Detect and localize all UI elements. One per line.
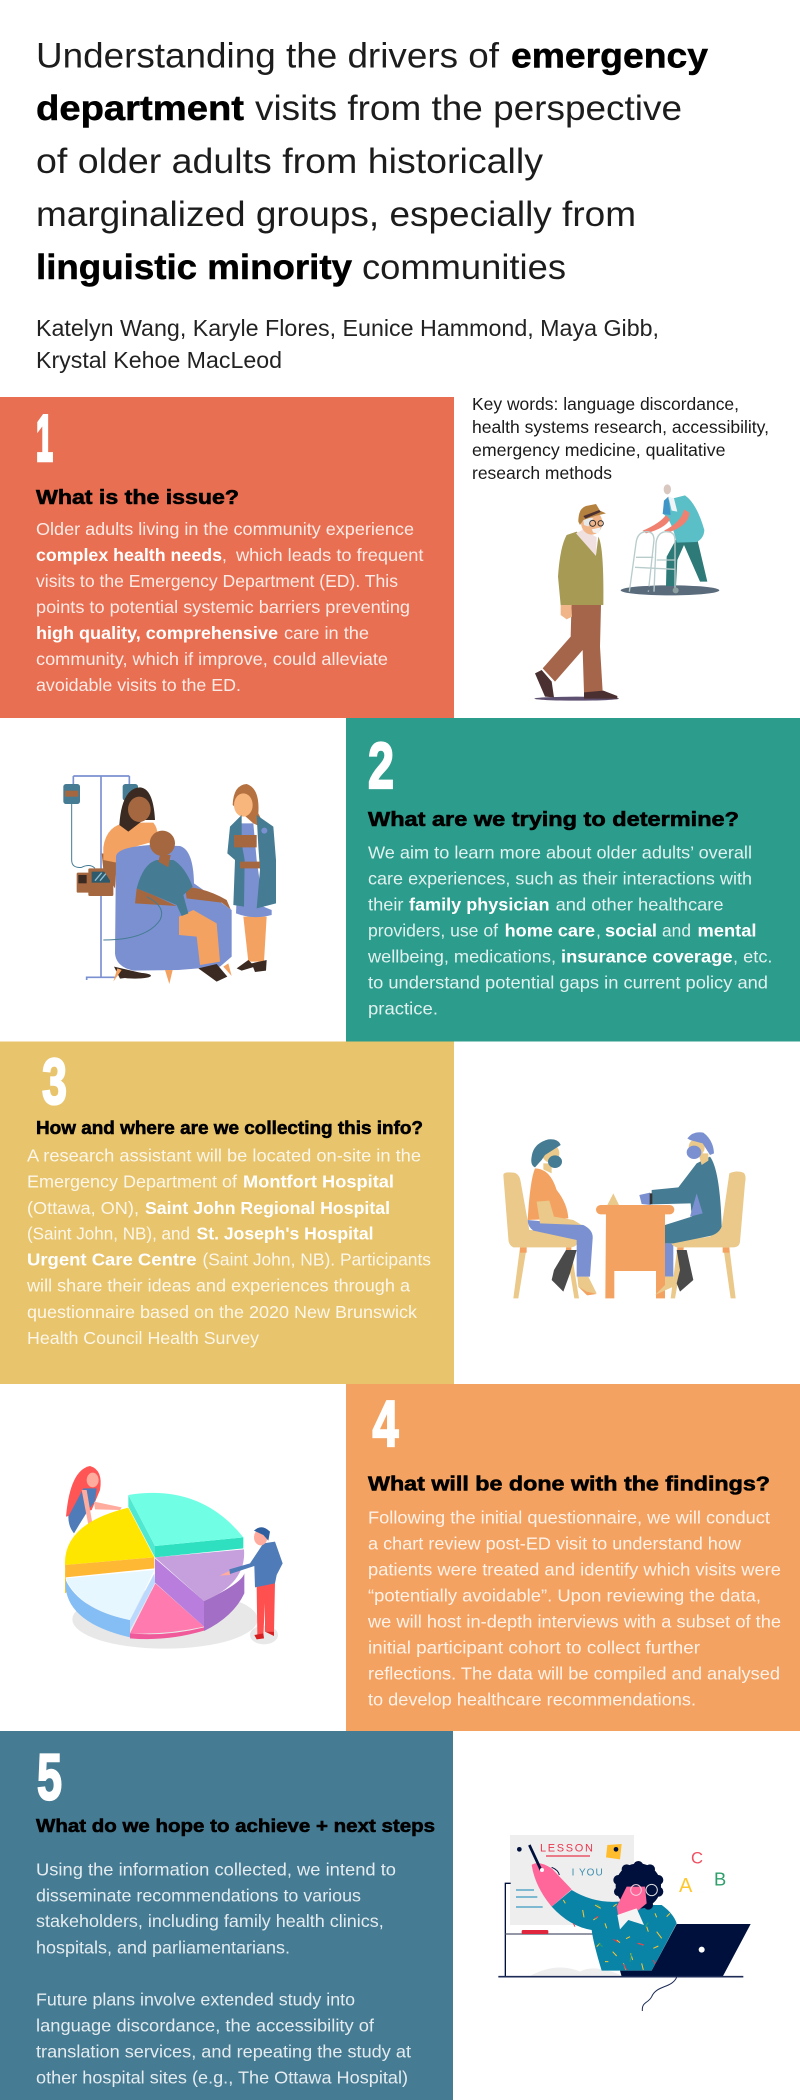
text block: collecting: questionnaire based on the 2020 New Brunswick bbox=[27, 1302, 417, 1322]
text block: findings: reflections. The data will be compiled and analysed bbox=[368, 1664, 780, 1684]
number 3: 3 bbox=[42, 1045, 67, 1118]
panel 3: how and where are we collecting this info bbox=[0, 1042, 454, 1384]
title: visits from the perspective bbox=[255, 89, 682, 128]
text block: recommendations: hospitals, and parliamentarians. bbox=[36, 1938, 290, 1958]
text block: determine: We aim to learn more about older adults’ overall bbox=[368, 842, 752, 862]
title: communities bbox=[362, 248, 566, 287]
text block: issue: points to potential systemic barriers preventing bbox=[36, 597, 410, 617]
text block: determine: , etc. bbox=[733, 946, 772, 966]
text block: issue: which leads to frequent bbox=[235, 545, 424, 565]
icon: teacher with board and laptop: LESSON bbox=[540, 1843, 595, 1855]
number 4: 4 bbox=[372, 1387, 398, 1460]
title: marginalized groups, especially from bbox=[36, 195, 636, 234]
key words: research methods bbox=[472, 463, 612, 483]
text block: issue: care in the bbox=[284, 623, 369, 643]
text block: issue: community, which if improve, could alleviate bbox=[36, 649, 388, 669]
authors bbox=[36, 315, 659, 373]
text block: determine: , bbox=[596, 921, 601, 941]
key words: health systems research, accessibility, bbox=[472, 417, 769, 437]
text block: issue: complex health needs bbox=[36, 545, 222, 565]
text block: findings: patients were treated and identify which visits were bbox=[368, 1559, 781, 1579]
heading: what will be done: What will be done with the findings? bbox=[368, 1473, 770, 1496]
text block: determine: providers, use of bbox=[368, 921, 498, 941]
icon: teacher with board and laptop bbox=[498, 1835, 751, 2011]
text block: determine: to understand potential gaps in current policy and bbox=[368, 972, 768, 992]
text block: collecting bbox=[26, 1146, 431, 1348]
number 2: 2 bbox=[368, 729, 394, 802]
icon: people with 3D pie chart bbox=[65, 1466, 283, 1649]
panel 1: what is the issue bbox=[0, 397, 454, 718]
text block: findings: to develop healthcare recommendations. bbox=[368, 1689, 696, 1709]
number 5: 5 bbox=[37, 1740, 62, 1814]
text block: determine: mental bbox=[698, 921, 756, 941]
icon: teacher with board and laptop: B bbox=[714, 1868, 726, 1889]
panel 5: what do we hope to achieve and next steps bbox=[0, 1731, 453, 2100]
key words: emergency medicine, qualitative bbox=[472, 440, 726, 460]
title: Understanding the drivers of bbox=[36, 36, 499, 76]
text block: future plans: language discordance, the accessibility of bbox=[36, 2016, 374, 2036]
text block: collecting: St. Joseph's Hospital bbox=[196, 1224, 374, 1244]
text block: determine bbox=[367, 842, 772, 1018]
text block: determine: practice. bbox=[368, 998, 438, 1018]
text block: issue: high quality, comprehensive bbox=[36, 623, 278, 643]
authors: Krystal Kehoe MacLeod bbox=[36, 347, 282, 373]
key words: Key words: language discordance, bbox=[472, 394, 739, 414]
text block: determine: and bbox=[662, 921, 691, 941]
text block: collecting: Saint John Regional Hospital bbox=[145, 1198, 390, 1218]
title: of older adults from historically bbox=[36, 142, 544, 181]
text block: collecting: will share their ideas and experiences through a bbox=[26, 1276, 410, 1296]
text block: future plans: other hospital sites (e.g., The Ottawa Hospital) bbox=[36, 2068, 408, 2088]
text block: determine: their bbox=[368, 894, 404, 914]
text block: collecting: Montfort Hospital bbox=[243, 1172, 394, 1192]
text block: collecting: A research assistant will be located on-site in the bbox=[27, 1146, 421, 1166]
text block: findings: a chart review post-ED visit to understand how bbox=[368, 1534, 741, 1554]
panel 2 background bbox=[346, 718, 800, 1042]
text block: recommendations: disseminate recommendations to various bbox=[36, 1885, 361, 1905]
panel 4: what will be done with the findings bbox=[346, 1384, 800, 1731]
text block: issue: , bbox=[222, 545, 227, 565]
text block: determine: and other healthcare bbox=[556, 894, 724, 914]
heading: how and where: How and where are we collecting this info? bbox=[36, 1118, 423, 1138]
panel 1: what is the issue: 1 bbox=[36, 402, 53, 474]
text block: issue bbox=[36, 519, 424, 695]
panel 2: what are we trying to determine bbox=[346, 718, 800, 1042]
text block: issue: visits to the Emergency Department (ED). This bbox=[36, 571, 398, 591]
title: emergency bbox=[511, 36, 709, 76]
text block: issue: Older adults living in the community experience bbox=[36, 519, 414, 539]
panel 5 background bbox=[0, 1731, 453, 2100]
text block: determine: care experiences, such as their interactions with bbox=[368, 868, 752, 888]
text block: collecting: Health Council Health Survey bbox=[27, 1328, 259, 1348]
text block: findings: we will host in-depth interviews with a subset of the bbox=[367, 1612, 781, 1632]
text block: findings: “potentially avoidable”. Upon reviewing the data, bbox=[368, 1585, 761, 1605]
text block: determine: family physician bbox=[409, 894, 550, 914]
panel 1 background bbox=[0, 397, 454, 718]
text block: collecting: (Ottawa, ON), bbox=[27, 1198, 139, 1218]
icon: teacher with board and laptop: C bbox=[691, 1848, 703, 1867]
text block: issue: avoidable visits to the ED. bbox=[36, 675, 241, 695]
heading: what is the issue: What is the issue? bbox=[36, 486, 239, 509]
icon: patient and clinician at a desk bbox=[503, 1132, 746, 1298]
key words bbox=[472, 394, 769, 483]
heading: what are we trying to determine: What are we trying to determine? bbox=[368, 808, 739, 831]
text block: collecting: (Saint John, NB). Participants bbox=[202, 1250, 431, 1270]
text block: future plans bbox=[36, 1989, 411, 2088]
title: department bbox=[36, 89, 244, 128]
text block: future plans: Future plans involve extended study into bbox=[36, 1989, 355, 2009]
heading: what do we hope to achieve: What do we hope to achieve + next steps bbox=[36, 1816, 435, 1836]
icon: teacher with board and laptop: A bbox=[679, 1875, 693, 1897]
text block: determine: social bbox=[605, 921, 657, 941]
icon: teacher with board and laptop: I YOU bbox=[572, 1868, 604, 1879]
title bbox=[36, 36, 709, 287]
text block: collecting: Urgent Care Centre bbox=[27, 1250, 197, 1270]
text block: determine: insurance coverage bbox=[561, 946, 733, 966]
text block: findings: initial participant cohort to collect further bbox=[368, 1638, 700, 1658]
text block: recommendations: Using the information collected, we intend to bbox=[36, 1859, 396, 1879]
text block: findings bbox=[367, 1508, 781, 1709]
text block: recommendations: stakeholders, including family health clinics, bbox=[36, 1911, 384, 1931]
panel 3 background bbox=[0, 1042, 454, 1384]
text block: collecting: (Saint John, NB), and bbox=[27, 1224, 190, 1244]
panel 4 background bbox=[346, 1384, 800, 1731]
text block: future plans: translation services, and repeating the study at bbox=[36, 2042, 411, 2062]
text block: determine: home care bbox=[505, 921, 595, 941]
authors: Katelyn Wang, Karyle Flores, Eunice Hammond, Maya Gibb, bbox=[36, 315, 659, 341]
text block: collecting: Emergency Department of bbox=[27, 1172, 237, 1192]
icon: older adults walking bbox=[534, 484, 719, 701]
title: linguistic minority bbox=[36, 248, 353, 287]
text block: findings: Following the initial questionnaire, we will conduct bbox=[368, 1508, 770, 1528]
icon: patient in chair with carer and doctor bbox=[63, 776, 276, 984]
text block: determine: wellbeing, medications, bbox=[367, 946, 556, 966]
text block: recommendations bbox=[36, 1859, 396, 1958]
